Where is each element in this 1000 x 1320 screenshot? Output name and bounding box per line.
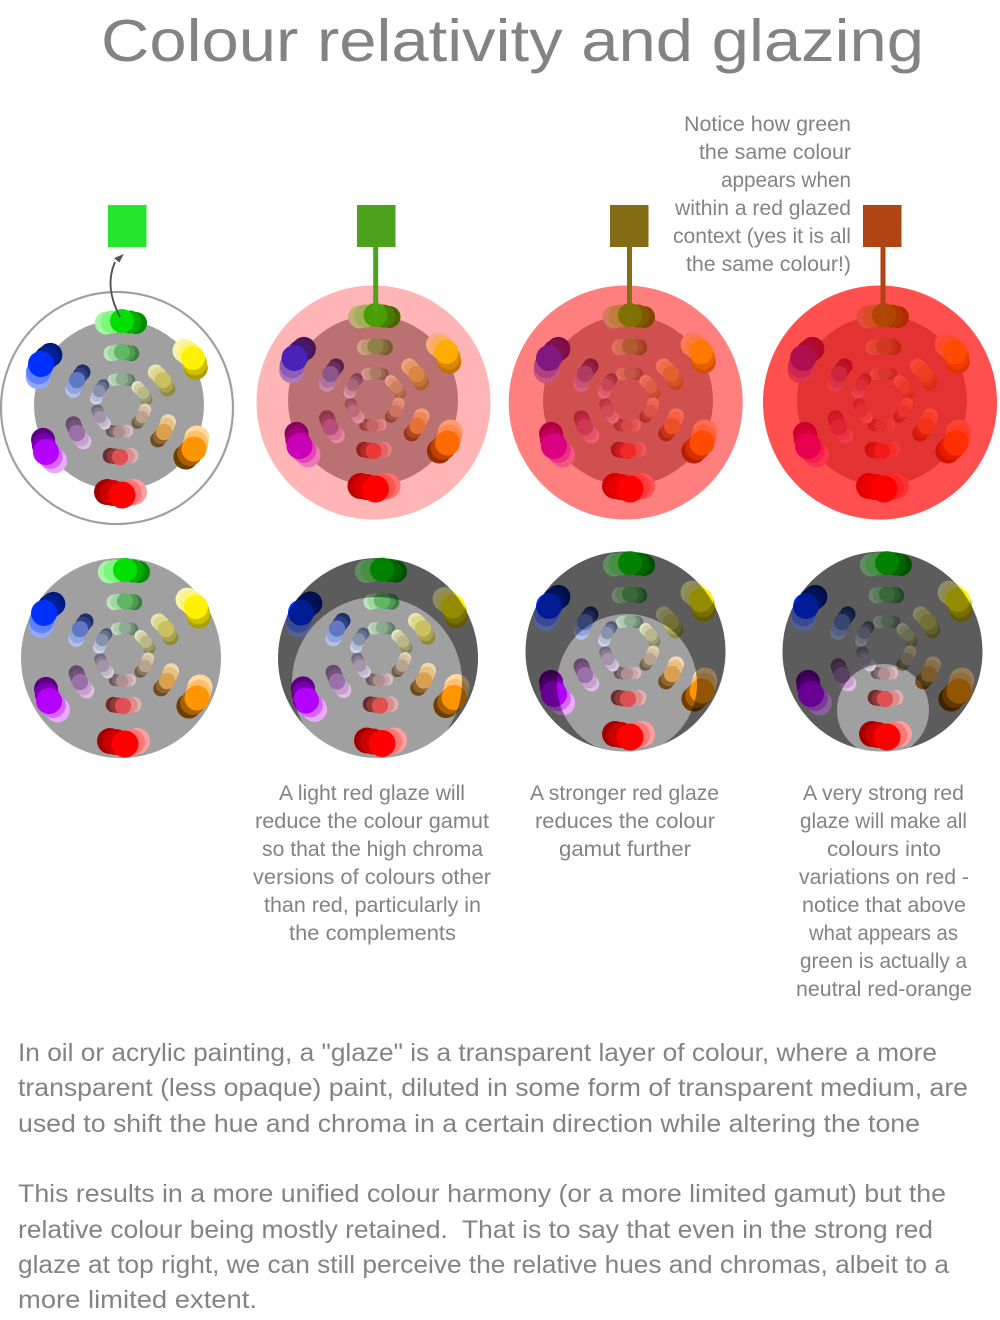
colour dots [271, 303, 470, 502]
panel: gamut under stronger glaze, bottom row [526, 551, 726, 752]
caption: very strong red glaze [796, 782, 972, 1001]
text block: note about the green appearance: within a red glazed [674, 197, 851, 220]
caption: light red glaze: versions of colours other [253, 866, 491, 889]
dark mask with small gamut window [782, 552, 982, 748]
caption: very strong red glaze: colours into [827, 838, 941, 861]
caption: light red glaze [253, 782, 491, 945]
text block: effect of a glaze [18, 1180, 949, 1314]
grey disc [797, 316, 967, 486]
colour dots [783, 551, 982, 750]
outer ring [1, 292, 233, 524]
text block: note about the green appearance: Notice how green [684, 113, 851, 136]
colour dots [18, 309, 217, 508]
caption: very strong red glaze: notice that above [802, 894, 966, 917]
text block: effect of a glaze: more limited extent. [18, 1286, 257, 1314]
caption: stronger red glaze [530, 782, 719, 861]
colour dots [780, 303, 979, 502]
grey disc [21, 558, 221, 758]
caption: stronger red glaze: gamut further [559, 838, 691, 861]
text block: definition of a glaze: transparent (less opaque) paint, diluted in some form of transparent medium, are [18, 1074, 968, 1102]
grey disc [288, 316, 458, 486]
light red glaze layer [256, 286, 490, 520]
panel: gamut under very strong glaze, bottom row [782, 551, 982, 752]
panel: full colour gamut, bottom row [21, 558, 221, 758]
caption: very strong red glaze: neutral red-orange [796, 978, 972, 1001]
text block: note about the green appearance: context (yes it is all [673, 225, 851, 248]
colour dots [526, 303, 725, 502]
text block: effect of a glaze: glaze at top right, we can still perceive the relative hues and chromas, albeit to a [18, 1251, 949, 1279]
caption: very strong red glaze: green is actually a [800, 950, 967, 973]
grey disc [526, 552, 726, 752]
caption: very strong red glaze: variations on red - [799, 866, 969, 889]
very strong red glaze layer [763, 286, 997, 520]
text block: note about the green appearance: appears when [721, 169, 851, 192]
caption: light red glaze: reduce the colour gamut [255, 810, 489, 833]
colour dots [278, 558, 477, 757]
grey disc [782, 552, 982, 752]
caption: very strong red glaze: glaze will make all [800, 810, 967, 833]
text block: definition of a glaze: used to shift the hue and chroma in a certain direction while altering the tone [18, 1110, 920, 1138]
text block: note about the green appearance: the same colour!) [686, 253, 851, 276]
caption: light red glaze: A light red glaze will [279, 782, 465, 805]
text block: effect of a glaze: relative colour being mostly retained. That is to say that even in the strong red [18, 1216, 933, 1244]
panel: light red glaze, top row [256, 205, 490, 520]
stronger red glaze layer [509, 286, 743, 520]
dark mask with medium gamut window [526, 552, 726, 748]
text block: note about the green appearance [673, 113, 851, 276]
caption: light red glaze: the complements [289, 922, 456, 945]
caption: light red glaze: so that the high chroma [262, 838, 483, 861]
text block: definition of a glaze: In oil or acrylic painting, a "glaze" is a transparent layer of colour, where a more [18, 1039, 937, 1067]
text block: note about the green appearance: the same colour [699, 141, 851, 164]
swatch with stem: glazed green [863, 205, 902, 323]
colour dots [526, 551, 725, 750]
grey disc [278, 558, 478, 758]
caption: stronger red glaze: A stronger red glaze [530, 782, 719, 805]
panel: gamut under light glaze, bottom row [278, 558, 478, 758]
grey disc [543, 316, 713, 486]
dark mask with large gamut window [278, 558, 478, 732]
panel: stronger red glaze, top row [509, 205, 743, 520]
text block: definition of a glaze [18, 1039, 968, 1138]
arrow: from green dot to swatch [110, 255, 123, 317]
grey disc [34, 320, 204, 490]
swatch with stem: glazed green [357, 205, 396, 323]
caption: light red glaze: than red, particularly in [264, 894, 481, 917]
text block: effect of a glaze: This results in a more unified colour harmony (or a more limited gamut) but the [18, 1180, 946, 1208]
caption: very strong red glaze: A very strong red [803, 782, 964, 805]
panel: colour wheel without glaze, top row [1, 205, 233, 524]
swatch with stem: glazed green [610, 205, 648, 323]
colour dots [21, 558, 220, 758]
title: Colour relativity and glazing [101, 8, 924, 74]
panel: very strong red glaze, top row [763, 205, 997, 520]
swatch: sampled green [108, 205, 146, 247]
caption: stronger red glaze: reduces the colour [535, 810, 715, 833]
caption: very strong red glaze: what appears as [808, 922, 958, 945]
